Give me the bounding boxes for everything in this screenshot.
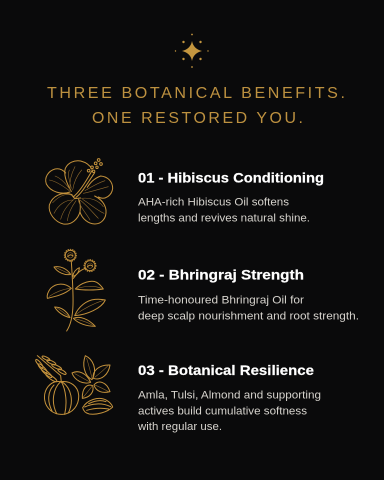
- text block: Hibiscus Conditioning: AHA-rich Hibiscus Oil softens: [138, 196, 290, 208]
- text block: Botanical Resilience: [137, 362, 321, 433]
- title: THREE BOTANICAL BENEFITS.: [47, 85, 348, 102]
- title: [47, 85, 348, 127]
- text block: Hibiscus Conditioning: [138, 170, 324, 224]
- text block: Botanical Resilience: 03 - Botanical Resilience: [138, 362, 314, 378]
- text block: Bhringraj Strength: Time-honoured Bhringraj Oil for: [138, 294, 304, 306]
- icon: hibiscus flower: [46, 159, 113, 224]
- text block: Bhringraj Strength: 02 - Bhringraj Strength: [138, 266, 304, 282]
- text block: Hibiscus Conditioning: 01 - Hibiscus Conditioning: [138, 170, 324, 186]
- text block: Bhringraj Strength: deep scalp nourishment and root strength.: [138, 310, 359, 322]
- text block: Hibiscus Conditioning: lengths and revives natural shine.: [138, 212, 310, 224]
- icon: sparkle star: [175, 34, 209, 68]
- icon: amla tulsi almond botanicals: [35, 355, 113, 414]
- text block: Bhringraj Strength: [138, 266, 359, 322]
- text block: Botanical Resilience: actives build cumulative softness: [138, 406, 308, 418]
- text block: Botanical Resilience: Amla, Tulsi, Almond and supporting: [138, 390, 321, 402]
- text block: Botanical Resilience: with regular use.: [137, 421, 222, 433]
- title: ONE RESTORED YOU.: [92, 110, 306, 127]
- icon: bhringraj plant: [47, 249, 105, 331]
